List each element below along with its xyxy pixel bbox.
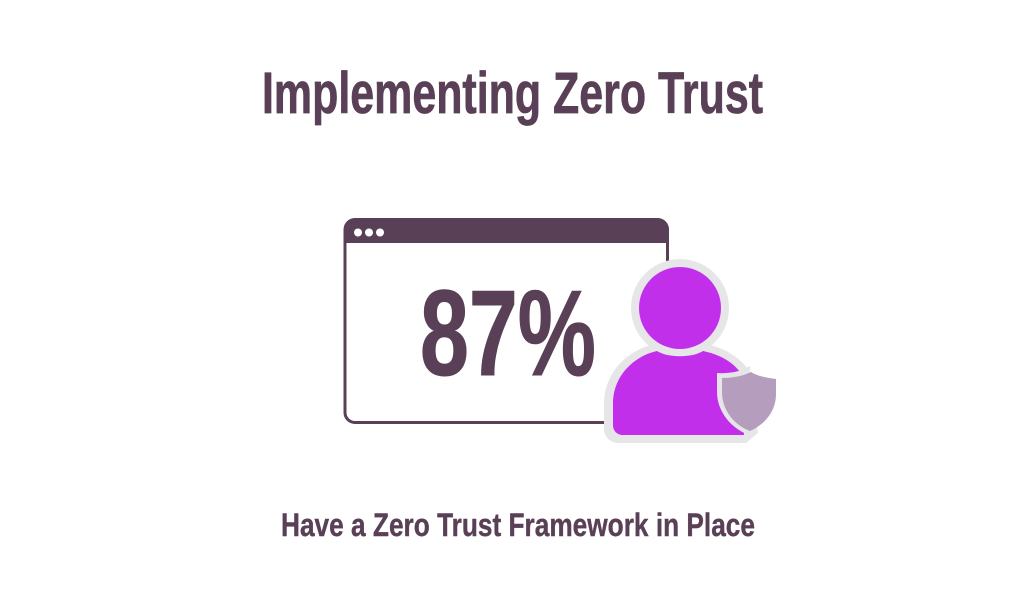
window control dots xyxy=(354,228,384,236)
title: Implementing Zero Trust xyxy=(262,61,763,126)
shield outline xyxy=(717,366,752,436)
window title bar xyxy=(344,218,669,243)
caption: Have a Zero Trust Framework in Place xyxy=(281,507,755,543)
shield xyxy=(722,372,776,431)
browser window frame xyxy=(344,218,669,422)
person body xyxy=(613,351,744,435)
person head xyxy=(639,267,721,349)
statistic: 87%: 87% xyxy=(420,265,596,401)
icon: person with shield xyxy=(604,259,776,443)
person outline xyxy=(604,259,758,443)
